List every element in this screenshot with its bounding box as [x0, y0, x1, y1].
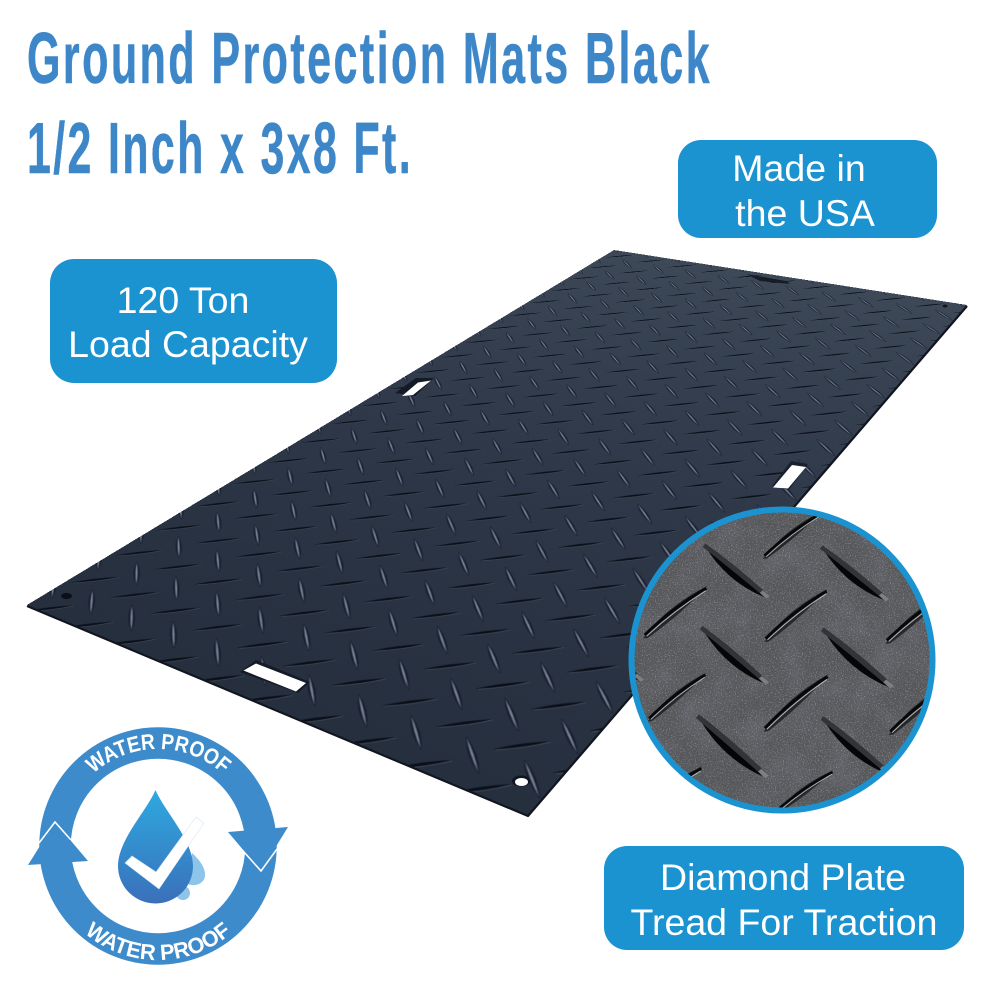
callout: load capacity: Load Capacity — [68, 323, 308, 365]
callout: diamond plate tread — [604, 846, 964, 950]
title — [27, 19, 712, 189]
arrow: left, pointing up — [28, 822, 88, 865]
badge ring — [55, 743, 261, 949]
callout: load capacity — [50, 259, 337, 383]
icon: water drop — [118, 790, 193, 904]
mat edge thickness: near edges — [27, 306, 967, 816]
mat: black diamond plate ground protection mat — [28, 250, 967, 815]
small droplets behind — [176, 853, 205, 900]
title line 2: 1/2 Inch x 3x8 Ft. — [27, 109, 413, 189]
callout: made in the USA: the USA — [735, 192, 875, 234]
badge text top: WATER PROOF — [84, 734, 232, 772]
mat slot: lower long edge — [772, 461, 808, 490]
callout: made in the USA — [678, 140, 937, 238]
detail lens: tread close-up photo — [628, 506, 936, 814]
badge: water proof — [28, 727, 288, 965]
mat hole: right corner — [942, 304, 948, 308]
callout: diamond plate tread: Diamond Plate — [660, 856, 906, 898]
callout: made in the USA: Made in — [732, 147, 866, 189]
mat slot: upper long edge — [395, 378, 434, 396]
mat slot: near short edge — [240, 660, 310, 693]
badge text bottom: WATER PROOF — [87, 921, 228, 960]
mat hole: left corner — [61, 593, 72, 599]
callout: diamond plate tread: Tread For Traction — [630, 901, 938, 943]
callout: load capacity: 120 Ton — [117, 279, 249, 321]
mat hole: bottom corner — [512, 776, 530, 786]
arrow: right, pointing down — [228, 827, 288, 871]
mat slot: far short edge — [746, 274, 790, 284]
icon: check mark — [125, 817, 204, 889]
